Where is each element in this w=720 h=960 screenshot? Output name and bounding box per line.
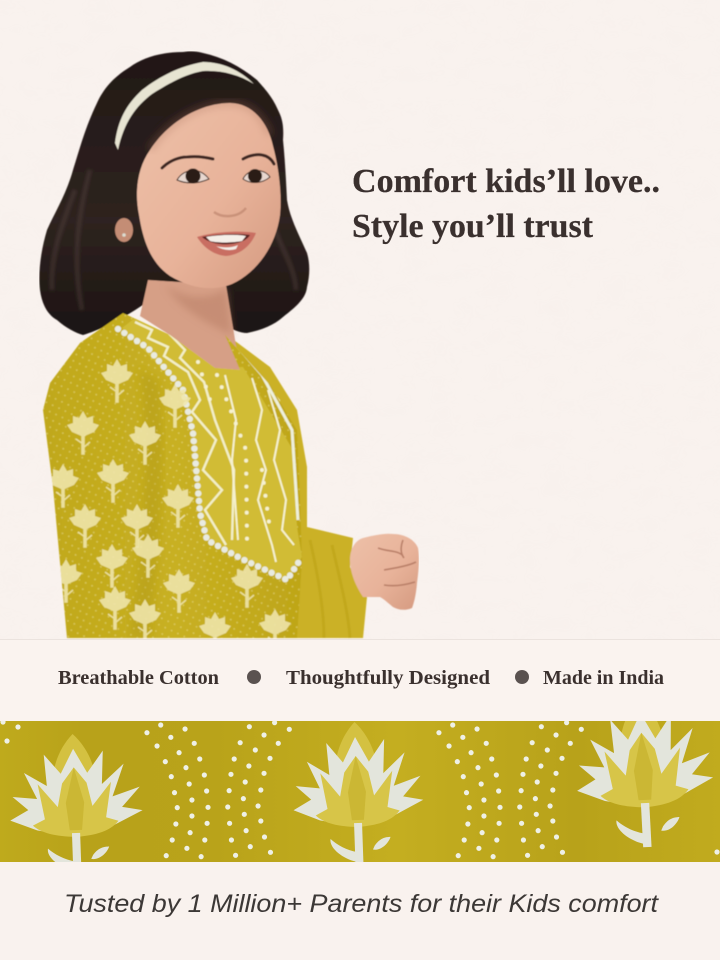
fabric print strip — [0, 721, 720, 862]
title line 2: Style you’ll trust — [352, 208, 594, 245]
lotus motif 1 — [10, 734, 142, 862]
photo: smiling girl in yellow kurta — [39, 51, 419, 655]
lotus motif 3 — [577, 721, 713, 848]
title line 1: Comfort kids’ll love.. — [352, 163, 660, 200]
ear — [115, 218, 133, 242]
mouth interior — [202, 234, 250, 244]
left iris — [186, 168, 200, 184]
neck — [140, 280, 240, 370]
forehead bangs shadow — [150, 103, 270, 150]
right iris — [248, 169, 262, 183]
mouth — [197, 232, 256, 256]
lace trim — [118, 329, 302, 580]
print motifs — [47, 359, 291, 655]
face — [137, 103, 281, 288]
fabric base — [0, 721, 720, 862]
paper texture — [0, 0, 720, 640]
neck shadow — [165, 285, 232, 335]
features row — [58, 667, 664, 689]
dupatta fold — [310, 540, 350, 638]
yoke wavy stripes — [225, 375, 294, 562]
hand — [350, 534, 419, 610]
sleeve shadow — [130, 370, 163, 638]
separator dot — [247, 670, 261, 684]
neckline trim — [236, 348, 300, 521]
dupatta — [223, 332, 367, 638]
hair highlight — [52, 170, 296, 310]
kurta dotted print — [40, 310, 310, 640]
separator dot — [515, 670, 529, 684]
panel: feature band background — [0, 640, 720, 721]
headband — [115, 62, 254, 150]
hair back — [39, 51, 309, 335]
kurta base — [40, 310, 310, 640]
feature: breathable cotton: Breathable Cotton — [58, 667, 219, 689]
yoke panel — [122, 318, 302, 580]
eyebrows — [162, 155, 274, 168]
left eye — [177, 170, 209, 183]
finger creases — [378, 540, 416, 586]
yoke zigzag lines — [135, 322, 234, 545]
dots group 2 — [439, 723, 581, 857]
dots group 1 — [147, 723, 289, 857]
bottom panel background — [0, 862, 720, 960]
yoke dotted columns — [198, 362, 270, 540]
edge dots — [3, 722, 717, 852]
kurta — [40, 310, 310, 655]
earring — [122, 233, 126, 237]
nose — [214, 208, 246, 216]
lotus motif 2 — [291, 720, 425, 867]
tagline: Tusted by 1 Million+ Parents for their Kids comfort — [64, 890, 659, 918]
title — [352, 163, 660, 245]
divider — [0, 639, 720, 640]
feature: made in india: Made in India — [543, 667, 664, 689]
right eye — [243, 170, 270, 183]
teeth — [206, 235, 246, 250]
feature: thoughtfully designed: Thoughtfully Designed — [286, 667, 490, 689]
